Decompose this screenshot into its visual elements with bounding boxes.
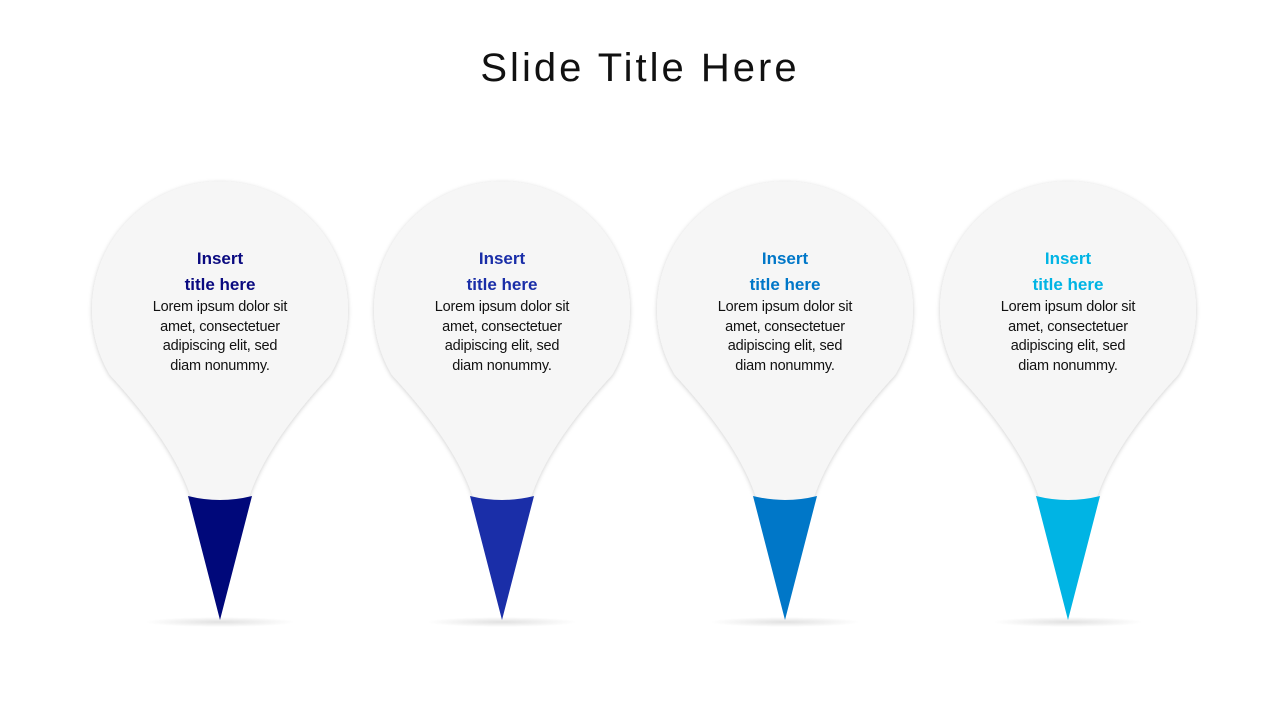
text 2: Insert <box>479 249 525 268</box>
text 3: Lorem ipsum dolor sit amet, consectetuer adipiscing elit, sed diam nonummy. <box>718 299 852 374</box>
text 3 <box>718 249 852 374</box>
text 4 <box>1001 249 1136 374</box>
pin 2 <box>374 182 630 627</box>
text 2 <box>435 249 570 374</box>
text 2: Lorem ipsum dolor sit amet, consectetuer adipiscing elit, sed diam nonummy. <box>435 299 569 374</box>
text 1 <box>153 249 288 374</box>
text 1: title here <box>185 275 255 294</box>
title: Slide Title Here <box>480 46 800 90</box>
text 3: Insert <box>762 249 808 268</box>
pin 1 <box>92 182 348 627</box>
text 2: title here <box>467 275 537 294</box>
text 4: title here <box>1033 275 1103 294</box>
text 3: title here <box>750 275 820 294</box>
pin 3 <box>657 182 913 627</box>
text 1: Lorem ipsum dolor sit amet, consectetuer adipiscing elit, sed diam nonummy. <box>153 299 287 374</box>
pin 4 <box>940 182 1196 627</box>
text 1: Insert <box>197 249 243 268</box>
text 4: Insert <box>1045 249 1091 268</box>
text 4: Lorem ipsum dolor sit amet, consectetuer adipiscing elit, sed diam nonummy. <box>1001 299 1135 374</box>
